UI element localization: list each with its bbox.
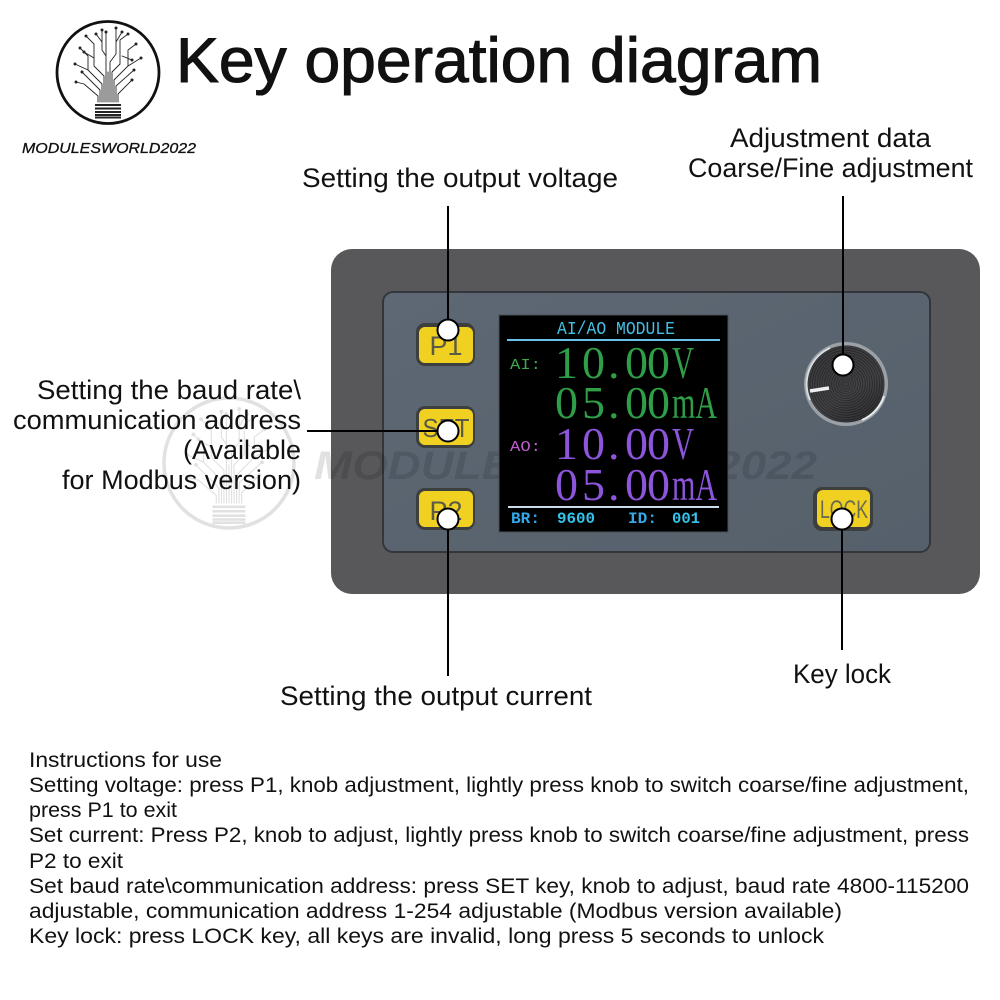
brand name: MODULESWORLD2022	[22, 140, 197, 157]
label: adjustment data: Coarse/Fine adjustment	[688, 153, 973, 183]
AO readings: V	[672, 418, 694, 469]
inner panel	[383, 292, 930, 552]
AI readings	[510, 337, 717, 428]
status bar	[508, 506, 719, 508]
instructions: Setting voltage: press P1, knob adjustment, lightly press knob to switch coarse/fine adjustment,	[29, 773, 969, 797]
screen header: AI/AO MODULE	[557, 320, 675, 340]
title: Key operation diagram	[176, 26, 822, 96]
instructions: Instructions for use	[29, 748, 222, 772]
AI readings: V	[672, 337, 694, 388]
instructions: Set current: Press P2, knob to adjust, lightly press knob to switch coarse/fine adjustment, press	[29, 823, 969, 847]
instructions: P2 to exit	[29, 849, 123, 873]
screen: 001	[672, 510, 700, 528]
button: P1: P1	[429, 331, 463, 361]
screen: 9600	[557, 510, 595, 528]
instructions: adjustable, communication address 1-254 adjustable (Modbus version available)	[29, 899, 842, 923]
button: SET	[416, 406, 475, 448]
device body	[331, 249, 980, 594]
AI readings: AI:	[510, 357, 541, 374]
AI readings: 10.00	[555, 337, 670, 388]
AO readings: mA	[672, 459, 717, 510]
watermark: MODULESWORLD2022	[314, 444, 817, 488]
label: key lock: Key lock	[793, 659, 891, 689]
button: LOCK	[813, 487, 873, 531]
button: SET: SET	[422, 413, 470, 443]
AO readings	[510, 418, 717, 510]
label: baud rate: for Modbus version)	[62, 465, 301, 495]
screen	[499, 315, 728, 532]
leader: knob	[832, 196, 854, 376]
leader: baud rate	[307, 420, 458, 442]
leader: lock	[832, 508, 852, 650]
label: baud rate: communication address	[13, 405, 301, 435]
screen: ID:	[628, 510, 657, 528]
AO readings: AO:	[510, 439, 541, 456]
button: P1	[416, 323, 475, 366]
label: adjustment data: Adjustment data	[730, 123, 932, 153]
button: LOCK: LOCK	[820, 496, 868, 524]
AO readings: 10.00	[555, 418, 670, 469]
button: P2: P2	[429, 496, 463, 526]
AI readings: 05.00	[555, 377, 670, 428]
label: output current: Setting the output current	[280, 681, 593, 711]
instructions	[29, 748, 969, 948]
logo	[57, 22, 159, 124]
label: baud rate: (Available	[183, 435, 301, 465]
instructions: Key lock: press LOCK key, all keys are invalid, long press 5 seconds to unlock	[29, 924, 824, 948]
label: adjustment data	[688, 123, 973, 183]
knob	[804, 342, 888, 426]
screen: BR:	[511, 510, 540, 528]
AI readings: mA	[672, 377, 717, 428]
leader: output voltage	[438, 206, 458, 340]
label: baud rate	[13, 375, 302, 495]
instructions: press P1 to exit	[29, 798, 177, 822]
watermark	[164, 398, 817, 528]
instructions: Set baud rate\communication address: press SET key, knob to adjust, baud rate 4800-115200	[29, 874, 969, 898]
AO readings: 05.00	[555, 459, 670, 510]
label: baud rate: Setting the baud rate\	[37, 375, 302, 405]
leader: output current	[438, 508, 458, 676]
button: P2	[416, 488, 475, 530]
label: setting output voltage: Setting the output voltage	[302, 163, 618, 193]
